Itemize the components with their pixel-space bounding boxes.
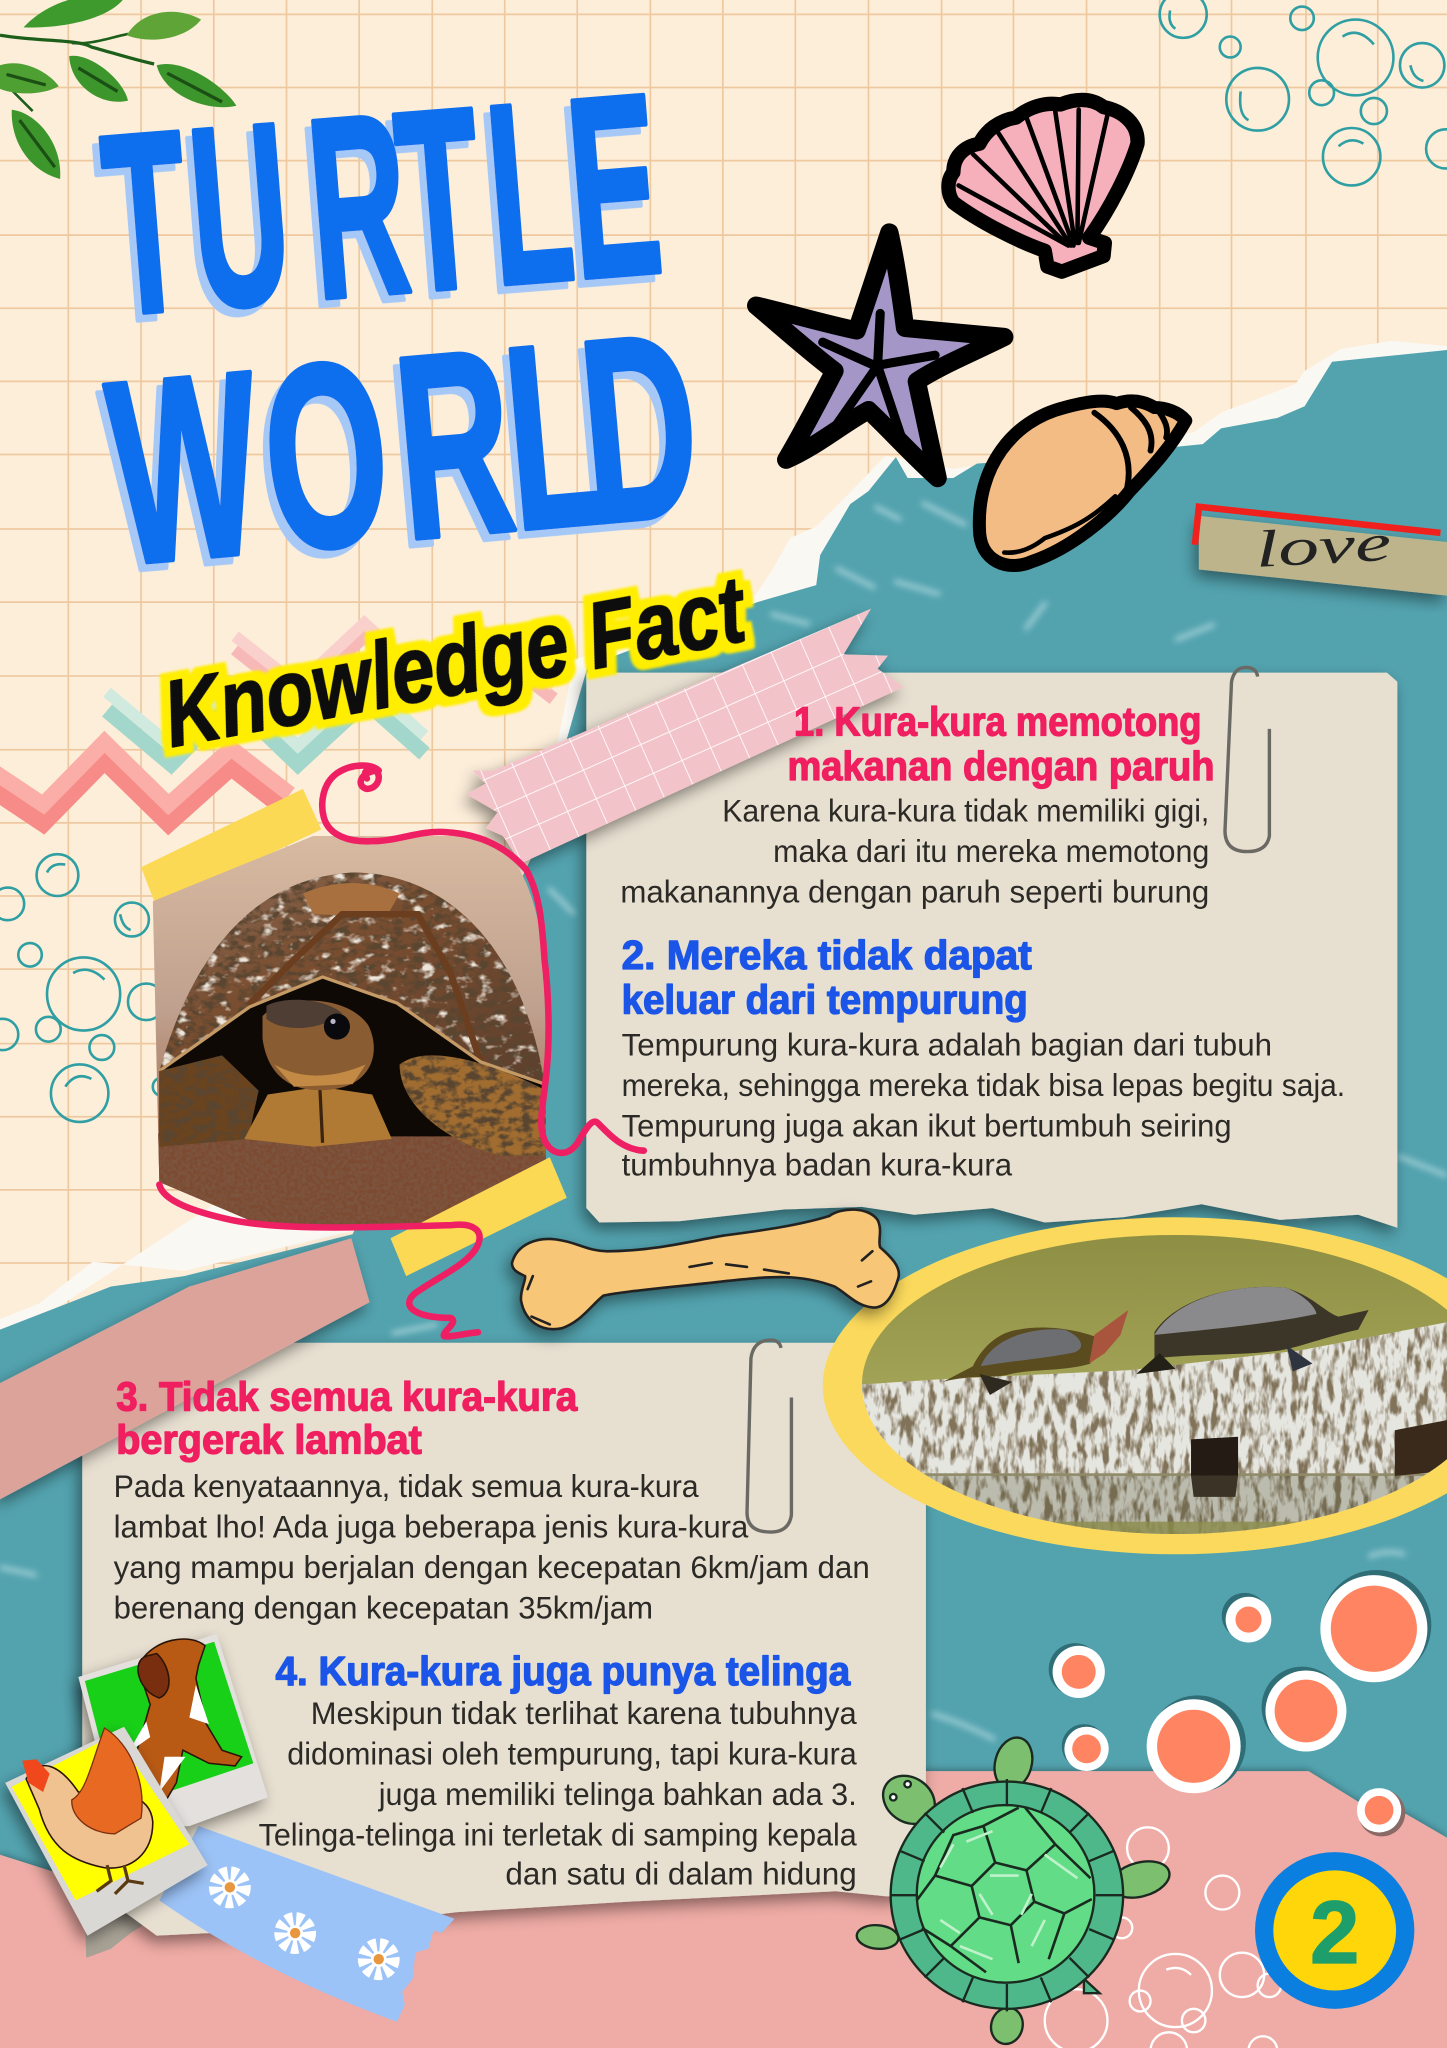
torn grey fringe [84, 1881, 170, 1958]
fact 2 heading: keluar dari tempurung [622, 977, 1028, 1023]
fact 2 heading [622, 932, 1032, 1023]
yellow tape top [141, 789, 321, 908]
fact 3 text [114, 1374, 870, 1625]
fact 1 body: makanannya dengan paruh seperti burung [620, 875, 1209, 910]
fact 1 heading [787, 698, 1215, 789]
pink dusty tape [0, 1238, 370, 1499]
title line 2: WORLD [98, 277, 709, 620]
yellow tape bottom [390, 1157, 567, 1276]
leaves [0, 0, 236, 179]
paperclip 2 [747, 1340, 791, 1532]
fact 4 body: juga memiliki telinga bahkan ada 3. [378, 1777, 857, 1812]
fact 2 heading: 2. Mereka tidak dapat [622, 932, 1032, 978]
fact 2 body: tumbuhnya badan kura-kura [622, 1148, 1013, 1183]
daisy 1 [217, 1874, 243, 1900]
fact 4 body [259, 1696, 857, 1892]
pink grid tape [466, 609, 904, 863]
bubbles left [0, 854, 171, 1122]
panel: paper 2 [82, 1343, 926, 1936]
conch shell [979, 401, 1186, 566]
polaroid: chicken [5, 1727, 208, 1936]
turtle photo [141, 789, 567, 1276]
fact 3 body [114, 1469, 870, 1625]
fact 3 heading [116, 1374, 578, 1463]
fact 2 body [622, 1027, 1345, 1183]
title [94, 40, 709, 620]
pink bottom paper [0, 1771, 1447, 2048]
starfish [756, 232, 1004, 478]
fact 2 body: Tempurung kura-kura adalah bagian dari tubuh [622, 1027, 1272, 1062]
fact 3 body: lambat lho! Ada juga beberapa jenis kura-kura [114, 1509, 749, 1544]
floral blue tape [159, 1826, 454, 2022]
page number badge: 2 [1310, 1883, 1359, 1982]
daisy 2 [282, 1920, 308, 1946]
knowledge fact heading: Knowledge Fact [156, 556, 756, 767]
green turtle icon [856, 1733, 1174, 2048]
fact 2 body: Tempurung juga akan ikut bertumbuh seiring [622, 1108, 1232, 1143]
white bubbles on pink [1045, 1827, 1281, 2048]
polaroid: dog [78, 1634, 268, 1829]
fact 4 body: dan satu di dalam hidung [505, 1857, 857, 1892]
page number badge [1255, 1852, 1414, 2009]
fact 4 text [259, 1648, 857, 1892]
fact 1 body: Karena kura-kura tidak memiliki gigi, [722, 794, 1209, 829]
oval turtles photo [823, 1217, 1447, 1554]
fact 3 body: berenang dengan kecepatan 35km/jam [114, 1590, 653, 1625]
fact 1 body: maka dari itu mereka memotong [773, 834, 1209, 869]
fact 3 heading: bergerak lambat [116, 1417, 422, 1463]
fact 4 heading: 4. Kura-kura juga punya telinga [276, 1648, 851, 1694]
love note: love [1254, 514, 1393, 579]
fact 2 text [622, 932, 1345, 1183]
bubbles top right [1160, 0, 1447, 185]
zigzag decorations [0, 623, 554, 823]
fact 1 heading: 1. Kura-kura memotong [794, 698, 1201, 744]
title line 1: TURTLE [94, 40, 670, 370]
fact 1 heading: makanan dengan paruh [787, 743, 1215, 789]
fact 1 text [620, 698, 1215, 910]
fact 2 body: mereka, sehingga mereka tidak bisa lepas begitu saja. [622, 1068, 1345, 1103]
fact 1 body [620, 794, 1209, 910]
pink squiggle line [159, 766, 644, 1336]
fact 4 body: didominasi oleh tempurung, tapi kura-kura [287, 1737, 857, 1772]
paperclip 1 [1225, 667, 1269, 852]
fact 3 heading: 3. Tidak semua kura-kura [116, 1374, 578, 1420]
fact 3 body: yang mampu berjalan dengan kecepatan 6km/jam dan [114, 1550, 870, 1585]
bone [512, 1210, 899, 1329]
fact 3 body: Pada kenyataannya, tidak semua kura-kura [114, 1469, 699, 1504]
coral dots [1049, 1570, 1431, 1836]
torn white paper edge [0, 341, 1447, 1345]
panel: paper 1 [586, 673, 1397, 1228]
scallop shell [948, 100, 1138, 272]
daisy 3 [366, 1946, 392, 1972]
fact 4 body: Meskipun tidak terlihat karena tubuhnya [311, 1696, 857, 1731]
love note [1195, 507, 1447, 596]
fact 4 body: Telinga-telinga ini terletak di samping kepala [259, 1818, 857, 1853]
